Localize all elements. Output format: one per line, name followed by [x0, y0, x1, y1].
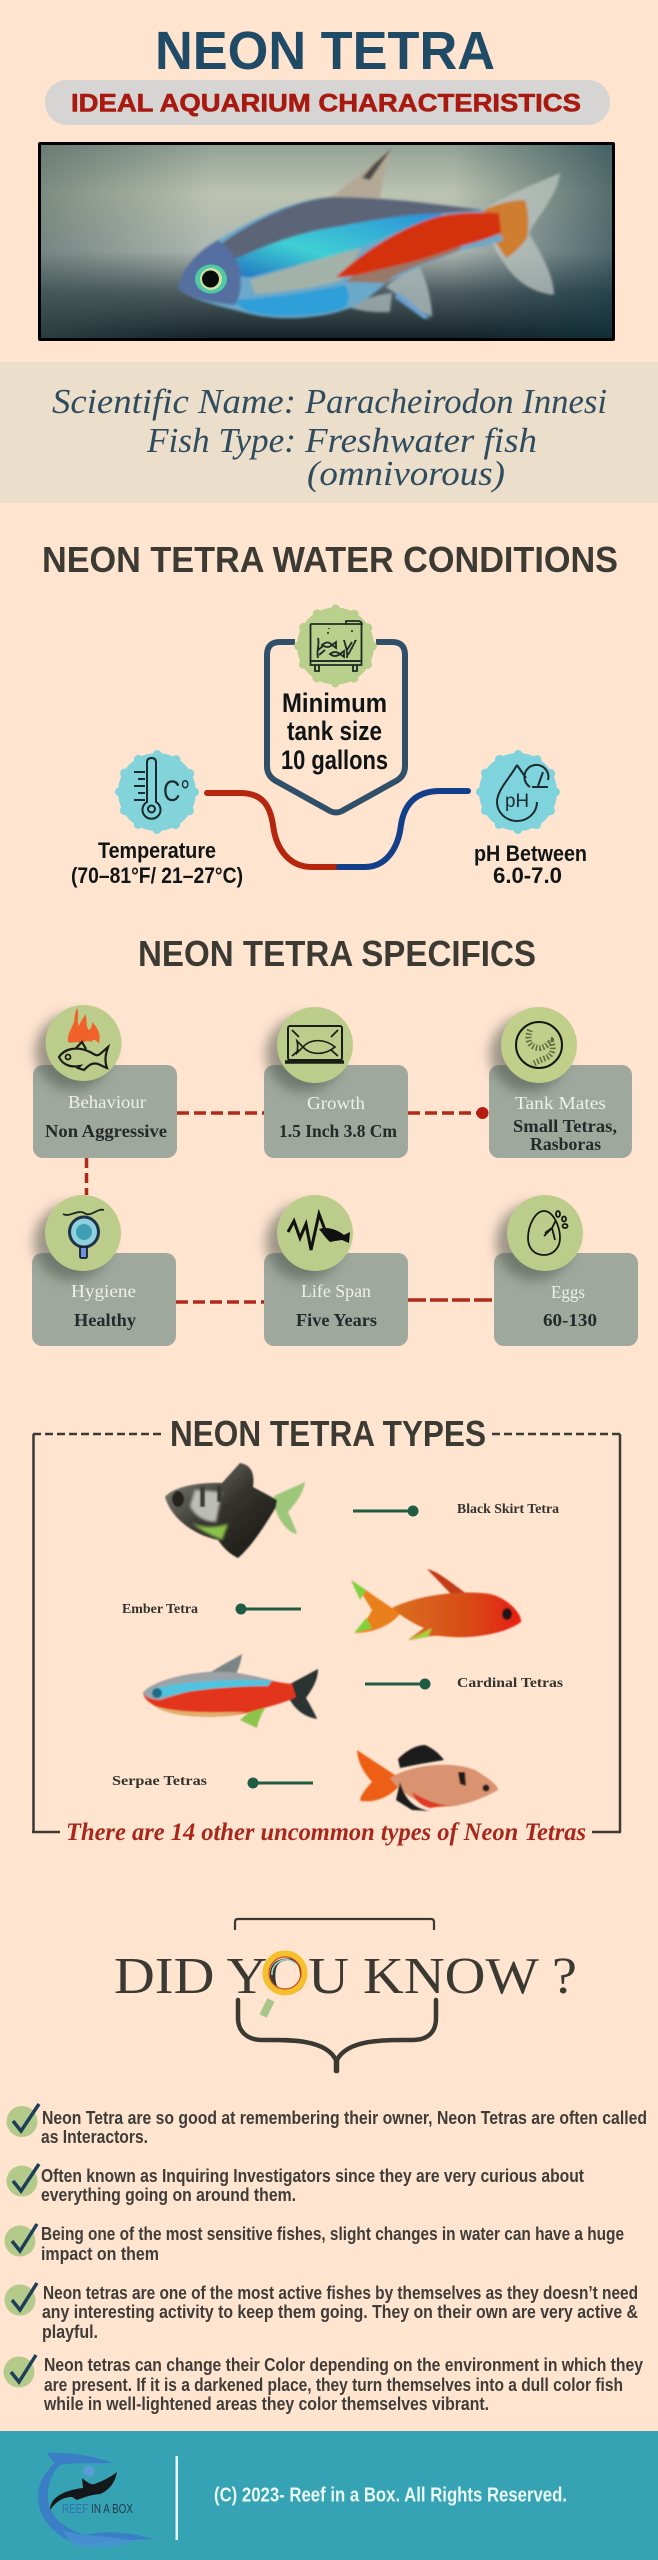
card: growth: 1.5 Inch 3.8 Cm: [279, 1121, 397, 1141]
card: growth: Growth: [307, 1093, 365, 1113]
heading: types: NEON TETRA TYPES: [170, 1413, 486, 1454]
title: NEON TETRA: [155, 21, 495, 81]
scientific info band: (omnivorous): [307, 454, 505, 493]
card: tank mates: Small Tetras,: [513, 1116, 617, 1136]
fact 2: Often known as Inquiring Investigators since they are very curious about: [41, 2166, 584, 2186]
dashed connectors: [86, 1113, 494, 1302]
hero photo of neon tetra: [38, 142, 615, 341]
card: tank mates: Rasboras: [530, 1134, 601, 1154]
temperature block: (70–81°F/ 21–27°C): [71, 863, 243, 888]
top bracket: [235, 1919, 434, 1930]
fact 5: [4, 2355, 643, 2414]
fact 1: as Interactors.: [41, 2127, 148, 2147]
icon: fish growth on screen: [285, 1026, 344, 1062]
footer: [0, 2431, 658, 2560]
temperature block: Temperature: [98, 838, 216, 863]
heading: specifics: NEON TETRA SPECIFICS: [138, 933, 536, 974]
pH block: 6.0-7.0: [493, 863, 562, 888]
pH block: [474, 753, 587, 888]
icon: pulse with fish: [288, 1214, 350, 1250]
icon: flame and fish: [59, 1008, 108, 1070]
icon: fish food bowl: [516, 1022, 562, 1068]
card: tank mates: [489, 1007, 632, 1158]
bottom curly brace: [238, 2000, 436, 2071]
fact 1: [6, 2104, 647, 2147]
card: hygiene: Hygiene: [71, 1281, 136, 1301]
pH block: pH: [505, 791, 529, 812]
tank size callout: tank size: [287, 716, 382, 746]
scientific info band: [0, 362, 658, 503]
label: cardinal tetras: [365, 1676, 564, 1691]
logo: reef in a box: [38, 2453, 153, 2548]
junction dot: [476, 1107, 488, 1119]
blue connector: [339, 791, 468, 867]
pH block: pH Between: [474, 841, 587, 866]
card: eggs: Eggs: [551, 1282, 585, 1302]
icon: aquarium: [310, 621, 362, 671]
card: eggs: [494, 1195, 638, 1346]
temperature block: C°: [163, 775, 190, 808]
card: hygiene: [32, 1195, 176, 1346]
tank size callout: 10 gallons: [281, 745, 388, 775]
fish: cardinal tetra: [143, 1654, 318, 1728]
icon: egg: [528, 1211, 568, 1255]
card: life span: [264, 1195, 408, 1346]
label: ember tetra: [122, 1602, 301, 1617]
fish: black skirt tetra: [165, 1463, 305, 1558]
fish: ember tetra: [351, 1569, 521, 1640]
card: behaviour: Behaviour: [68, 1092, 146, 1112]
card: behaviour: [33, 1005, 177, 1158]
scientific info band: Fish Type:: [146, 421, 296, 460]
icon: pH drop: [497, 765, 548, 821]
icon: thermometer: [134, 758, 160, 819]
subtitle pill: IDEAL AQUARIUM CHARACTERISTICS: [71, 90, 581, 118]
label: black skirt tetra: Black Skirt Tetra: [457, 1502, 559, 1517]
scientific info band: Paracheirodon Innesi: [304, 382, 607, 421]
scientific info band: Freshwater fish: [304, 421, 537, 460]
icon: magnifier: [63, 1210, 104, 1258]
types frame: [32, 1434, 621, 1832]
label: serpae tetras: Serpae Tetras: [112, 1774, 208, 1789]
card: life span: Life Span: [301, 1281, 371, 1301]
fact 5: while in well-lightened areas they color themselves vibrant.: [43, 2394, 489, 2414]
tank size callout: [267, 608, 405, 812]
fact 3: [4, 2224, 624, 2264]
temperature block: [71, 753, 243, 888]
subtitle pill: [45, 80, 610, 125]
card: tank mates: Tank Mates: [515, 1093, 606, 1113]
card: hygiene: Healthy: [74, 1310, 136, 1330]
card: life span: Five Years: [296, 1310, 377, 1330]
fact 2: everything going on around them.: [41, 2185, 296, 2205]
scientific info band: Scientific Name:: [52, 382, 296, 421]
label: cardinal tetras: Cardinal Tetras: [457, 1676, 564, 1691]
red connector: [207, 793, 339, 867]
copyright: (C) 2023- Reef in a Box. All Rights Reserved.: [214, 2484, 567, 2506]
label: serpae tetras: [112, 1774, 313, 1789]
heading: water conditions: NEON TETRA WATER CONDITIONS: [42, 539, 618, 580]
fact 4: [4, 2283, 638, 2342]
fact 2: [6, 2164, 584, 2205]
note: uncommon types: There are 14 other uncommon types of Neon Tetras: [66, 1819, 586, 1846]
tank size callout: Minimum: [282, 688, 387, 718]
icon: magnifying glass: [263, 1954, 304, 2016]
fact 3: impact on them: [41, 2244, 159, 2264]
card: growth: [264, 1007, 408, 1158]
card: eggs: 60-130: [543, 1310, 597, 1330]
logo: reef in a box: REEF IN A BOX: [62, 2501, 133, 2516]
fact 4: playful.: [42, 2322, 98, 2342]
heading: did you know: DID YOU KNOW ?: [114, 1948, 577, 2005]
label: black skirt tetra: [353, 1502, 559, 1517]
card: behaviour: Non Aggressive: [45, 1121, 167, 1141]
fish: serpae tetra: [357, 1745, 498, 1811]
label: ember tetra: Ember Tetra: [122, 1602, 198, 1617]
